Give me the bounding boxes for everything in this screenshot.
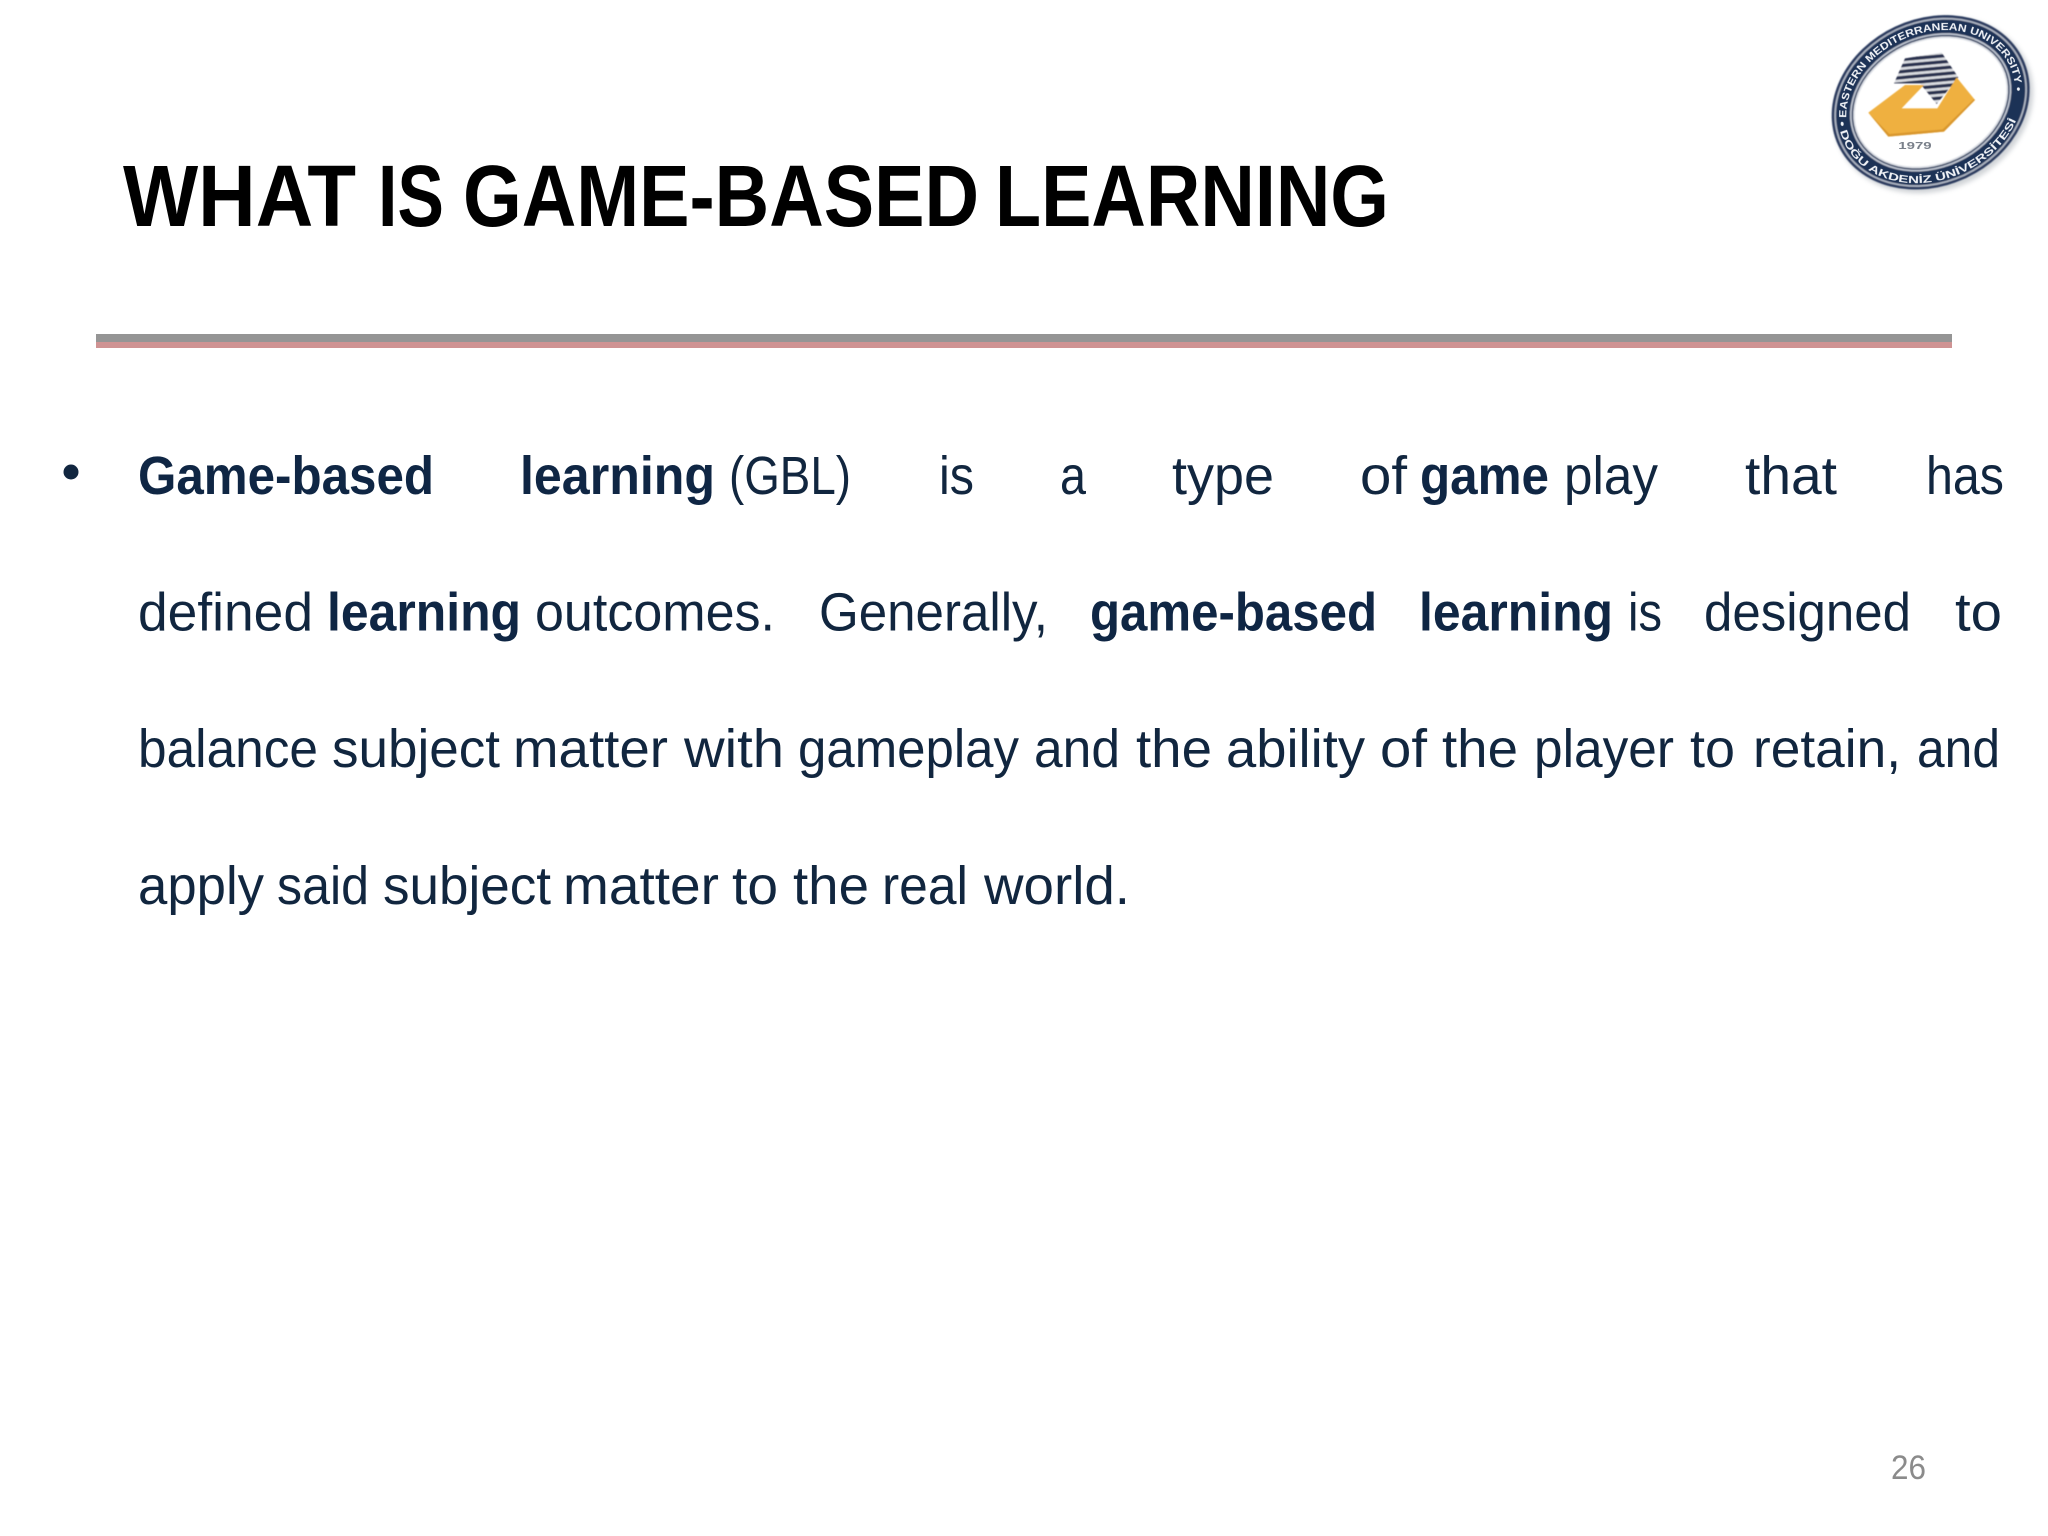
body text line 2: Generally, xyxy=(819,582,1048,642)
body text line 4: to xyxy=(732,856,778,916)
body text line 4: matter xyxy=(563,856,719,916)
body text line 1: of xyxy=(1360,446,1408,506)
body text line 2: to xyxy=(1955,582,2002,642)
page number: 26 xyxy=(1891,1449,1926,1487)
body text line 4 xyxy=(138,856,1130,916)
body text line 2 xyxy=(138,582,2002,642)
body text line 1: has xyxy=(1926,446,2004,506)
body text line 3: gameplay xyxy=(798,719,1019,779)
body text line 4: real xyxy=(882,856,968,916)
logo: Eastern Mediterranean University seal: EASTERN MEDITERRANEAN UNIVERSITY • xyxy=(1838,22,2022,118)
body text line 3 xyxy=(138,719,2000,779)
logo: Eastern Mediterranean University seal: 1979 xyxy=(1898,141,1933,152)
body text line 3: balance xyxy=(138,719,318,779)
title: GAME-BASED xyxy=(463,148,979,245)
body text line 4: subject xyxy=(383,856,551,916)
body text line 1: a xyxy=(1060,446,1087,506)
body text line 2: designed xyxy=(1704,582,1911,642)
title: IS xyxy=(378,148,444,245)
body text line 4: apply xyxy=(138,856,264,916)
logo: Eastern Mediterranean University seal: • DOĞU AKDENİZ ÜNİVERSİTESİ xyxy=(1840,117,2016,184)
body text line 3: and xyxy=(1917,719,2000,779)
body text line 4: world. xyxy=(983,856,1130,916)
body text line 2: learning xyxy=(1419,582,1613,642)
logo: Eastern Mediterranean University seal xyxy=(1830,14,2036,196)
body text line 4: the xyxy=(793,856,869,916)
body text line 3: to xyxy=(1690,719,1735,779)
body text line 1: learning xyxy=(520,446,715,506)
body text line 2: outcomes. xyxy=(535,582,775,642)
body text line 1: game xyxy=(1420,446,1549,506)
body text line 2: defined xyxy=(138,582,313,642)
body text line 1 xyxy=(138,446,2004,506)
body text line 1: Game-based xyxy=(138,446,434,506)
body text line 3: and xyxy=(1034,719,1120,779)
body text line 3: retain, xyxy=(1753,719,1901,779)
body text line 3: ability xyxy=(1226,719,1365,779)
body text line 3: the xyxy=(1136,719,1212,779)
body text line 1: (GBL) xyxy=(729,446,851,506)
body text line 1: type xyxy=(1172,446,1274,506)
title xyxy=(123,148,1389,245)
body text line 3: player xyxy=(1534,719,1674,779)
body text line 3: with xyxy=(683,719,784,779)
body text line 1: play xyxy=(1564,446,1658,506)
body text line 1: that xyxy=(1745,446,1837,506)
body text line 3: subject xyxy=(332,719,500,779)
body text line 3: matter xyxy=(513,719,668,779)
body text line 4: said xyxy=(277,856,369,916)
body text line 2: game-based xyxy=(1090,582,1377,642)
divider rule xyxy=(96,334,1952,348)
title: LEARNING xyxy=(995,148,1389,245)
body text line 3: the xyxy=(1442,719,1518,779)
body text line 1: is xyxy=(939,446,974,506)
body text line 2: learning xyxy=(327,582,521,642)
body text line 2: is xyxy=(1628,582,1662,642)
title: WHAT xyxy=(123,148,356,245)
bullet marker xyxy=(64,464,78,480)
body text line 3: of xyxy=(1380,719,1428,779)
